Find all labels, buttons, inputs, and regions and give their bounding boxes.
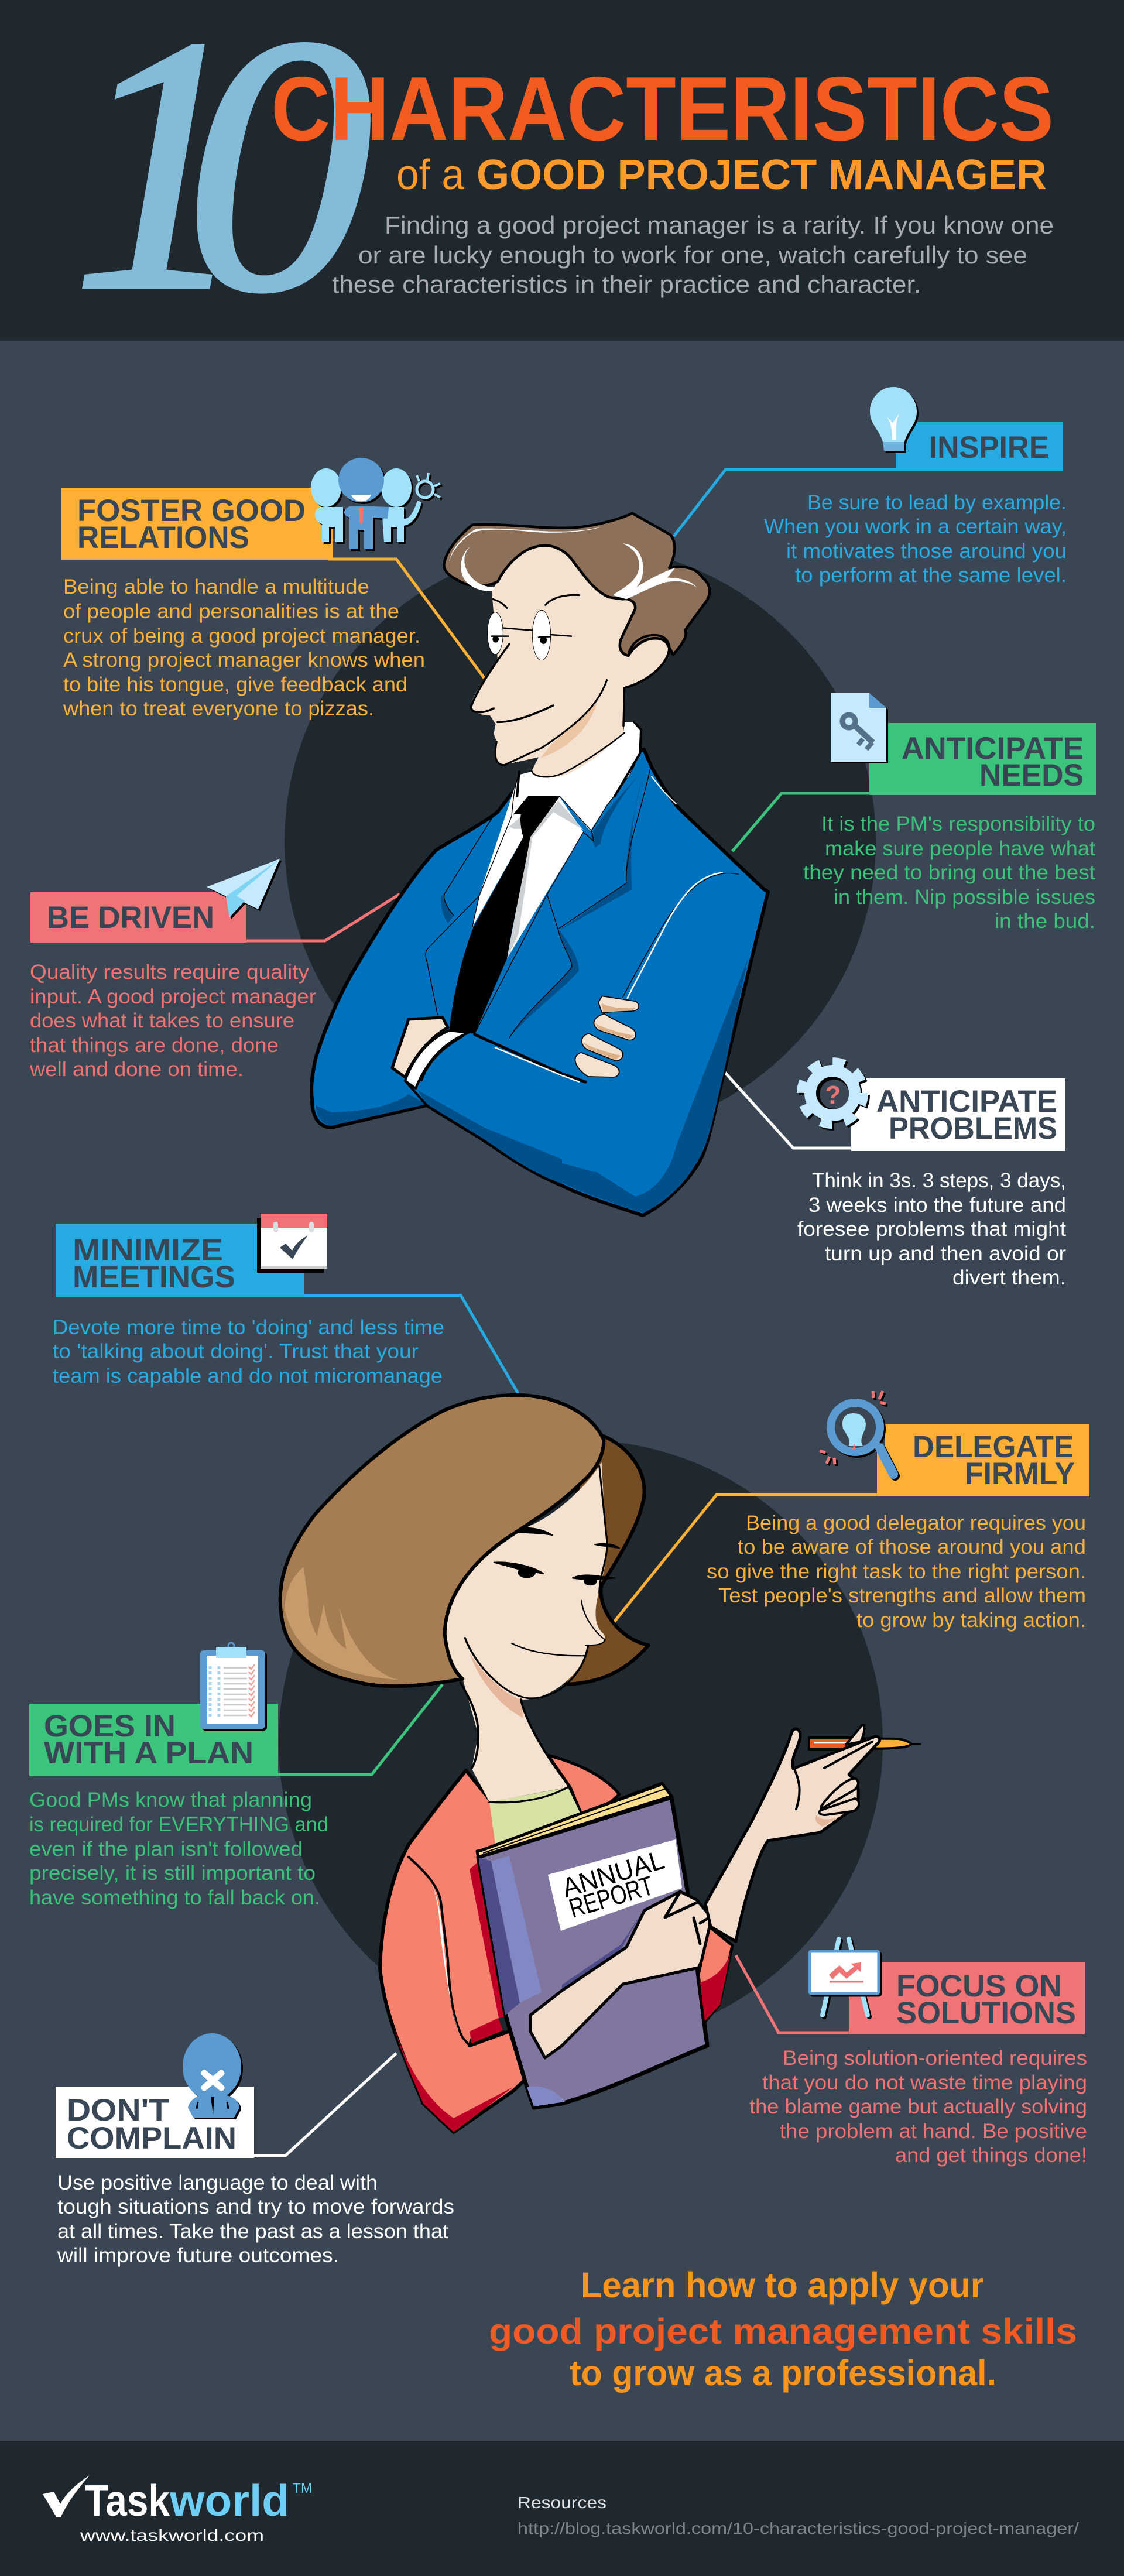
- panel: minimize meetings: MINIMIZE: [73, 1233, 223, 1268]
- panel: minimize meetings: [53, 1214, 518, 1393]
- panel: anticipate needs: they need to bring out the best: [803, 861, 1095, 884]
- logo: Taskworld: TM: [293, 2481, 312, 2496]
- title: CHARACTERISTICS: [271, 58, 1054, 159]
- panel: focus on solutions: Being solution-oriented requires: [783, 2047, 1087, 2070]
- suit: [311, 749, 768, 1215]
- intro text: or are lucky enough to work for one, watch carefully to see: [358, 241, 1027, 269]
- panel: don't complain: at all times. Take the past as a lesson that: [57, 2220, 448, 2243]
- panel: don't complain: Use positive language to deal with: [57, 2171, 378, 2194]
- panel: anticipate problems: divert them.: [952, 1266, 1066, 1289]
- panel: be driven: Quality results require quality: [30, 961, 310, 984]
- resources: [518, 2493, 1079, 2537]
- icon: presentation board: [810, 1939, 879, 2015]
- header band: [0, 0, 1124, 368]
- panel: foster good relations: [61, 458, 484, 720]
- panel: minimize meetings: MEETINGS: [73, 1260, 235, 1294]
- panel: don't complain: [56, 2033, 454, 2267]
- panel: inspire: INSPIRE: [929, 430, 1049, 465]
- icon: gear with question mark: ?: [825, 1081, 841, 1109]
- panel: foster good relations: FOSTER GOOD: [77, 494, 306, 528]
- logo: Taskworld: world: [169, 2476, 289, 2525]
- panel: goes in with a plan: precisely, it is still important to: [29, 1862, 316, 1885]
- panel: anticipate needs: in them. Nip possible issues: [834, 886, 1095, 909]
- panel: anticipate problems: Think in 3s. 3 steps, 3 days,: [812, 1169, 1066, 1192]
- panel: be driven: that things are done, done: [30, 1034, 279, 1057]
- icon: light bulb: [870, 387, 917, 451]
- panel: anticipate problems: [722, 1063, 1066, 1289]
- call to action: Learn how to apply your: [581, 2265, 984, 2305]
- call to action: good project management skills: [489, 2311, 1077, 2351]
- panel: anticipate problems: foresee problems that might: [797, 1218, 1066, 1241]
- jacket: [380, 1770, 549, 2132]
- panel: goes in with a plan: even if the plan isn't followed: [29, 1838, 303, 1861]
- panel: minimize meetings: to 'talking about doing'. Trust that your: [53, 1340, 419, 1363]
- panel: foster good relations: when to treat everyone to pizzas.: [63, 697, 374, 720]
- book: [477, 1783, 707, 2108]
- panel: foster good relations: crux of being a good project manager.: [63, 625, 420, 648]
- label: annual report: REPORT: [566, 1870, 657, 1924]
- footer band: [0, 2441, 1124, 2576]
- call to action: to grow as a professional.: [570, 2353, 996, 2393]
- panel: goes in with a plan: have something to fall back on.: [29, 1886, 320, 1909]
- panel: anticipate problems: ANTICIPATE: [876, 1084, 1057, 1119]
- suit details: [426, 749, 738, 1077]
- icon: clipboard: [200, 1643, 265, 1729]
- head and neck: [280, 1395, 619, 1803]
- panel: goes in with a plan: WITH A PLAN: [44, 1736, 253, 1770]
- panel: be driven: [29, 859, 400, 1081]
- panel: goes in with a plan: GOES IN: [44, 1709, 176, 1743]
- logo: Taskworld: www.taskworld.com: [80, 2526, 264, 2544]
- panel: anticipate needs: [732, 693, 1096, 933]
- panel: minimize meetings: team is capable and do not micromanage: [53, 1365, 443, 1388]
- subtitle: GOOD PROJECT MANAGER: [477, 152, 1047, 198]
- panel: anticipate needs: in the bud.: [995, 910, 1095, 933]
- glasses: [488, 610, 551, 660]
- panel: delegate firmly: Being a good delegator requires you: [746, 1512, 1086, 1534]
- intro text: Finding a good project manager is a rarity. If you know one: [385, 211, 1054, 239]
- icon: calendar: [257, 1214, 327, 1273]
- arm line: [475, 1034, 585, 1082]
- subtitle: of a: [396, 152, 465, 198]
- panel: inspire: When you work in a certain way,: [764, 515, 1067, 538]
- call to action: [489, 2265, 1077, 2393]
- logo: Taskworld: [43, 2475, 312, 2544]
- panel: delegate firmly: DELEGATE: [913, 1430, 1074, 1464]
- top: [489, 1787, 585, 1862]
- panel: delegate firmly: [612, 1391, 1089, 1632]
- panel: anticipate needs: make sure people have what: [825, 837, 1095, 860]
- panel: foster good relations: Being able to handle a multitude: [63, 576, 369, 598]
- panel: delegate firmly: so give the right task to the right person.: [707, 1560, 1086, 1583]
- background circle: man: [285, 546, 876, 1137]
- illustration: man with crossed arms: [311, 513, 768, 1215]
- panel: goes in with a plan: Good PMs know that planning: [29, 1789, 312, 1811]
- panel: anticipate needs: ANTICIPATE: [902, 731, 1084, 766]
- panel: anticipate problems: 3 weeks into the future and: [808, 1194, 1066, 1217]
- panel: don't complain: will improve future outcomes.: [57, 2244, 339, 2267]
- icon: key document: [831, 693, 886, 762]
- big number 10: [73, 0, 373, 368]
- panel: focus on solutions: [736, 1939, 1087, 2167]
- panel: inspire: [674, 387, 1067, 587]
- panel: foster good relations: to bite his tongue, give feedback and: [63, 673, 407, 696]
- panel: focus on solutions: the blame game but actually solving: [749, 2095, 1087, 2118]
- icon: gear with question mark: [802, 1063, 863, 1123]
- icon: team of people: [311, 458, 440, 549]
- label: annual report: ANNUAL: [558, 1844, 667, 1903]
- panel: inspire: Be sure to lead by example.: [807, 491, 1067, 514]
- panel: be driven: well and done on time.: [29, 1058, 244, 1081]
- fingers: [575, 996, 639, 1077]
- panel: be driven: BE DRIVEN: [47, 900, 214, 935]
- panel: be driven: does what it takes to ensure: [30, 1009, 294, 1032]
- panel: inspire: to perform at the same level.: [795, 564, 1067, 587]
- label: annual report: [548, 1839, 682, 1931]
- panel: anticipate problems: PROBLEMS: [889, 1111, 1057, 1146]
- panel: anticipate problems: turn up and then avoid or: [825, 1242, 1066, 1265]
- panel: focus on solutions: FOCUS ON: [896, 1969, 1062, 2003]
- panel: foster good relations: RELATIONS: [77, 520, 249, 555]
- logo: Taskworld: Task: [85, 2476, 170, 2525]
- left hand and cuff: [392, 1018, 448, 1077]
- panel: foster good relations: of people and personalities is at the: [63, 600, 399, 623]
- pen and pointing hand: [705, 1725, 920, 1941]
- panel: minimize meetings: Devote more time to 'doing' and less time: [53, 1316, 444, 1339]
- panel: don't complain: DON'T: [67, 2093, 169, 2128]
- panel: delegate firmly: FIRMLY: [965, 1457, 1075, 1491]
- panel: delegate firmly: Test people's strengths and allow them: [718, 1584, 1086, 1607]
- holding arm and hand: [562, 1912, 643, 1996]
- head: [444, 513, 710, 796]
- panel: foster good relations: A strong project manager knows when: [63, 649, 425, 672]
- intro text: these characteristics in their practice and character.: [332, 270, 921, 298]
- icon: paper plane: [207, 859, 280, 917]
- panel: focus on solutions: and get things done!: [895, 2144, 1087, 2167]
- panel: delegate firmly: to be aware of those around you and: [738, 1536, 1086, 1558]
- panel: goes in with a plan: [29, 1643, 443, 1909]
- panel: delegate firmly: to grow by taking action.: [856, 1609, 1086, 1632]
- panel: anticipate needs: It is the PM's responsibility to: [821, 813, 1095, 835]
- resources: Resources: [518, 2493, 606, 2512]
- panel: focus on solutions: SOLUTIONS: [896, 1996, 1076, 2030]
- panel: don't complain: tough situations and try to move forwards: [57, 2195, 454, 2218]
- panel: don't complain: COMPLAIN: [67, 2121, 237, 2156]
- intro text: [332, 211, 1054, 298]
- icon: magnifying glass: [820, 1391, 893, 1474]
- panel: anticipate needs: NEEDS: [979, 758, 1084, 793]
- panel: focus on solutions: that you do not waste time playing: [762, 2071, 1087, 2094]
- front hair: [280, 1395, 604, 1686]
- back hair: [548, 1436, 649, 1684]
- panel: goes in with a plan: is required for EVERYTHING and: [29, 1813, 328, 1836]
- raised arm cuff: [698, 1927, 732, 2023]
- resources: http://blog.taskworld.com/10-characteristics-good-project-manager/: [518, 2519, 1079, 2537]
- icon: person with taped mouth: [183, 2033, 241, 2118]
- background circle: woman: [279, 1440, 883, 2044]
- illustration: woman holding annual report: [280, 1395, 920, 2132]
- panel: be driven: input. A good project manager: [30, 985, 316, 1008]
- panel: focus on solutions: the problem at hand. Be positive: [780, 2120, 1087, 2143]
- panel: inspire: it motivates those around you: [786, 540, 1067, 563]
